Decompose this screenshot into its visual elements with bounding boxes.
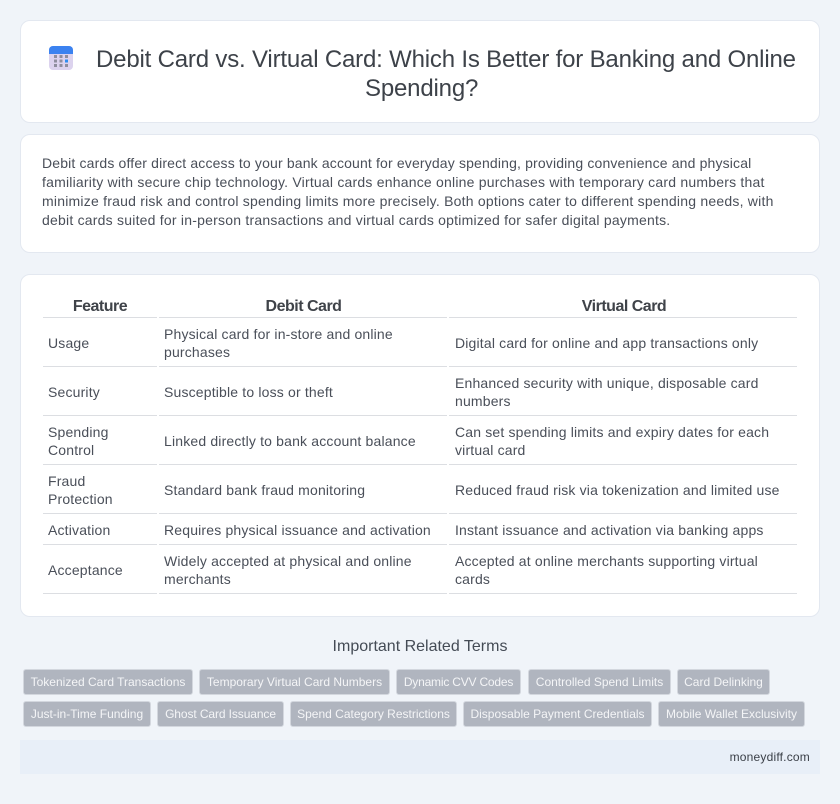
row: security: numbers [455, 393, 511, 409]
row: security: Security [48, 384, 100, 400]
related term chips: Disposable Payment Credentials [470, 707, 645, 721]
row: acceptance: Acceptance [48, 562, 123, 578]
title: Spending? [365, 75, 478, 102]
row: fraud protection: Fraud [48, 473, 85, 489]
title: Debit Card vs. Virtual Card: Which Is Better for Banking and Online [96, 46, 796, 73]
row: fraud protection: Protection [48, 491, 113, 507]
related term chips: Mobile Wallet Exclusivity [666, 707, 797, 721]
related term chips: Controlled Spend Limits [536, 675, 663, 689]
row: acceptance: cards [455, 571, 490, 587]
row: activation: Requires physical issuance and activation [164, 522, 431, 538]
intro paragraph: familiarity with secure chip technology. Virtual cards enhance online purchases with temporary card numbers that [42, 174, 765, 190]
related term chips: Spend Category Restrictions [297, 707, 450, 721]
panel: comparison table [20, 274, 820, 617]
footer [20, 740, 820, 774]
row: security: Enhanced security with unique, disposable card [455, 375, 759, 391]
row: usage: Usage [48, 335, 89, 351]
row: usage: Physical card for in-store and online [164, 326, 393, 342]
related term chips: Card Delinking [684, 675, 763, 689]
intro paragraph: debit cards suited for in-person transactions and virtual cards optimized for safer digital payments. [42, 212, 670, 228]
row: activation: Activation [48, 522, 110, 538]
icon: calendar [49, 46, 73, 70]
row: fraud protection: Standard bank fraud monitoring [164, 482, 365, 498]
related term chips: Temporary Virtual Card Numbers [207, 675, 382, 689]
row: spending control [48, 424, 769, 458]
row: acceptance [48, 553, 758, 587]
row: usage: Digital card for online and app transactions only [455, 335, 758, 351]
related term chips [23, 669, 805, 727]
footer: moneydiff.com [730, 750, 810, 764]
row: security [48, 375, 759, 409]
title [96, 46, 796, 102]
panel: intro text [20, 134, 820, 253]
row: usage [48, 326, 758, 360]
row: spending control: Control [48, 442, 94, 458]
row: acceptance: Widely accepted at physical and online [164, 553, 412, 569]
row: fraud protection: Reduced fraud risk via tokenization and limited use [455, 482, 780, 498]
row: usage: purchases [164, 344, 230, 360]
row: spending control: virtual card [455, 442, 526, 458]
row: activation: Instant issuance and activation via banking apps [455, 522, 764, 538]
related term chips: Tokenized Card Transactions [31, 675, 185, 689]
intro paragraph: minimize fraud risk and control spending limits more precisely. Both options cater to different spending needs, with [42, 193, 774, 209]
intro paragraph [42, 155, 774, 228]
related term chips: Ghost Card Issuance [165, 707, 276, 721]
row: acceptance: Accepted at online merchants supporting virtual [455, 553, 758, 569]
row: spending control: Can set spending limits and expiry dates for each [455, 424, 769, 440]
header panel [20, 20, 820, 123]
related term chips: Dynamic CVV Codes [404, 675, 513, 689]
comparison table [43, 298, 797, 594]
table header: Feature [73, 298, 127, 315]
row: security: Susceptible to loss or theft [164, 384, 333, 400]
heading: related terms: Important Related Terms [333, 638, 507, 655]
intro paragraph: Debit cards offer direct access to your bank account for everyday spending, providing convenience and physical [42, 155, 751, 171]
row: spending control: Spending [48, 424, 109, 440]
row: acceptance: merchants [164, 571, 231, 587]
related term chips: Just-in-Time Funding [31, 707, 143, 721]
table header [73, 298, 666, 315]
row: fraud protection [48, 473, 780, 507]
row: spending control: Linked directly to bank account balance [164, 433, 416, 449]
table header: Debit Card [266, 298, 341, 315]
row: activation [48, 522, 764, 538]
table header: Virtual Card [582, 298, 666, 315]
